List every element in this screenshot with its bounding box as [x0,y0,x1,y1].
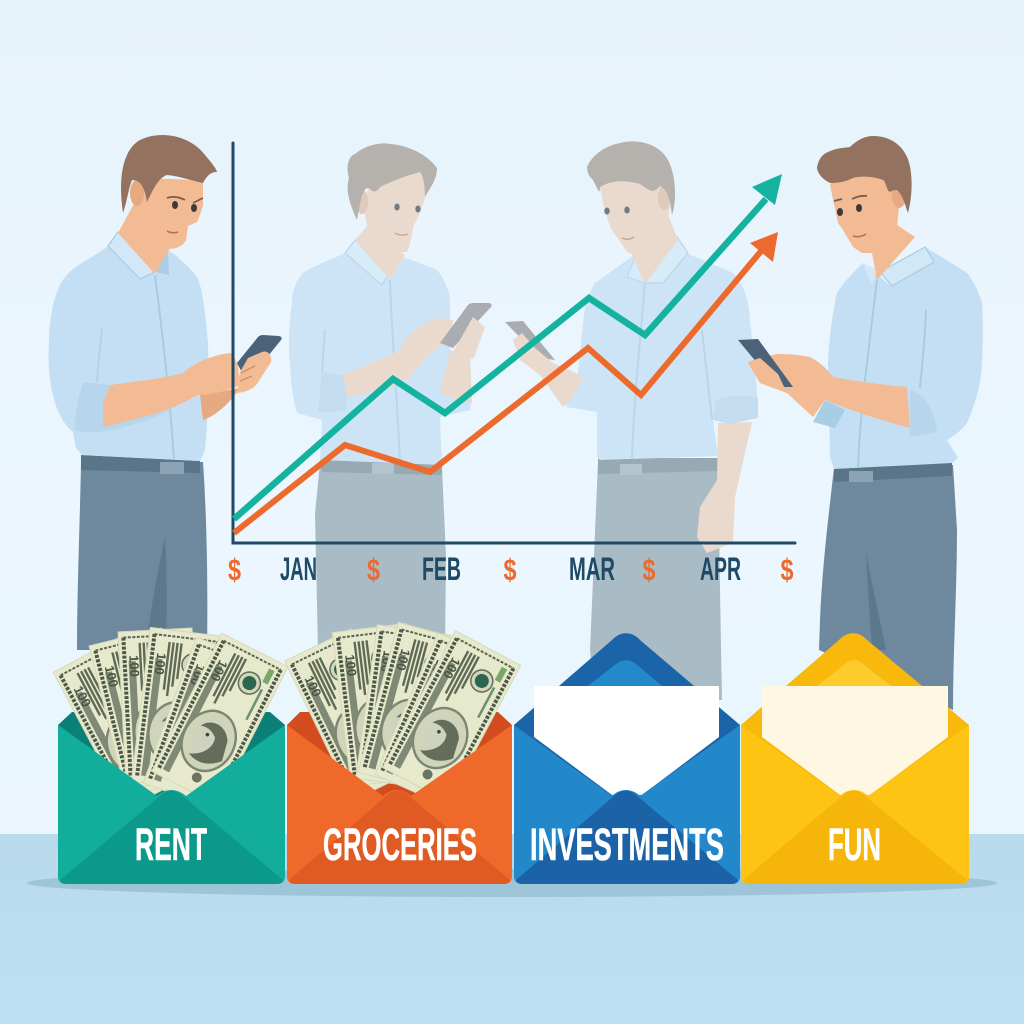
fun label: FUN [828,819,881,870]
axis label: third dollar sign: $ [504,552,516,587]
axis label: APR: APR [700,551,741,587]
cash in groceries envelope: 100 [426,658,449,684]
envelope: fun [741,633,969,884]
axis label: JAN: JAN [280,551,317,587]
phone [237,335,282,382]
teal trend line with arrow [234,174,782,519]
floor [0,834,1024,1024]
cash in rent envelope: 100 [102,664,122,689]
rent label: RENT [135,819,207,870]
cash in rent envelope: 100 [187,662,209,688]
orange trend line with arrow [234,232,778,533]
investments label: INVESTMENTS [530,819,724,870]
cash in rent envelope: 100 [71,683,94,709]
axis label: first dollar sign: $ [228,552,241,587]
person 4: solid figure on the right [738,136,983,710]
letter paper [534,686,719,795]
phone [738,339,793,387]
person 3: faded figure [505,141,758,700]
person 1: solid figure on the left [49,135,282,650]
cash in groceries envelope: 100 [440,655,463,681]
axis label: MAR: MAR [569,551,615,587]
envelope: investments [514,633,740,884]
groceries label: GROCERIES [323,819,477,870]
cash in groceries envelope [285,622,521,805]
person 2: faded figure [289,143,492,650]
line chart [228,143,795,587]
axis label: FEB: FEB [422,551,461,587]
cash in rent envelope: 100 [208,658,231,684]
cash in rent envelope: 100 [126,655,142,677]
cash in groceries envelope: 100 [302,673,325,699]
envelope: rent [53,627,288,884]
cash in rent envelope: 100 [152,652,169,676]
axis label: second dollar sign: $ [367,552,380,587]
cash in groceries envelope: 100 [342,654,360,677]
axis label: fourth dollar sign: $ [642,552,656,587]
envelope: groceries [285,622,521,884]
letter paper [762,686,948,795]
cash in groceries envelope: 100 [393,647,413,672]
cash in rent envelope [53,627,288,809]
chart axes [233,143,795,543]
floor shadow [27,869,997,897]
axis label: fifth dollar sign: $ [780,552,794,587]
cash in groceries envelope: 100 [378,650,396,673]
